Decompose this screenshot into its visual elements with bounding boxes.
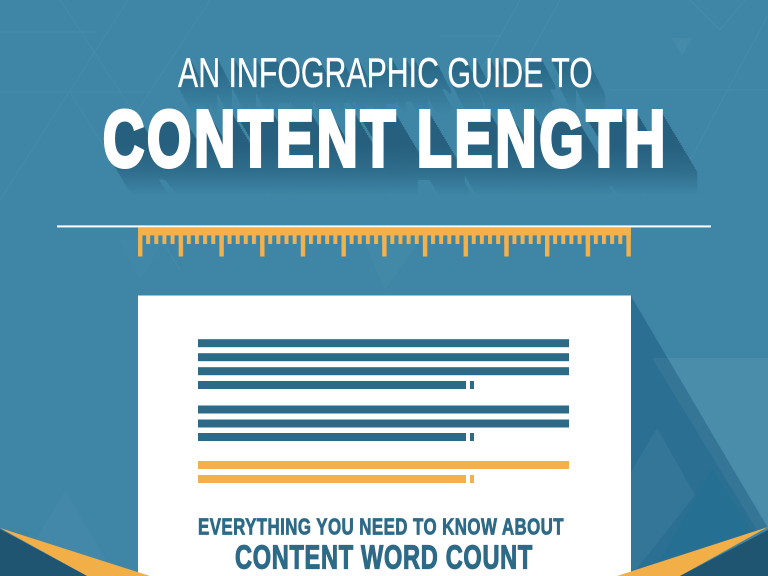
light panel behind shadow: [666, 358, 768, 527]
paragraph 1 lines: [198, 339, 569, 389]
ruler long ticks: [138, 235, 631, 256]
paragraph 2 lines: [198, 406, 569, 441]
highlighted lines: [198, 461, 569, 483]
ruler short ticks: [138, 235, 631, 244]
heading: content length: CONTENT LENGTH: [103, 94, 668, 183]
subtitle line 1: EVERYTHING YOU NEED TO KNOW ABOUT: [198, 514, 564, 540]
subtitle line 2: CONTENT WORD COUNT: [235, 539, 533, 576]
heading: an infographic guide to: AN INFOGRAPHIC GUIDE TO: [178, 48, 593, 96]
dark shadow triangle: [630, 296, 767, 576]
card panel: [138, 296, 631, 576]
shadow inner band: [652, 358, 767, 530]
left ribbon: [0, 528, 150, 576]
shadow deep triangle: [660, 468, 752, 560]
ruler band: [138, 227, 631, 235]
white rule line: [57, 225, 711, 227]
shadow lighter triangle: [631, 428, 695, 576]
right ribbon: [617, 527, 768, 576]
